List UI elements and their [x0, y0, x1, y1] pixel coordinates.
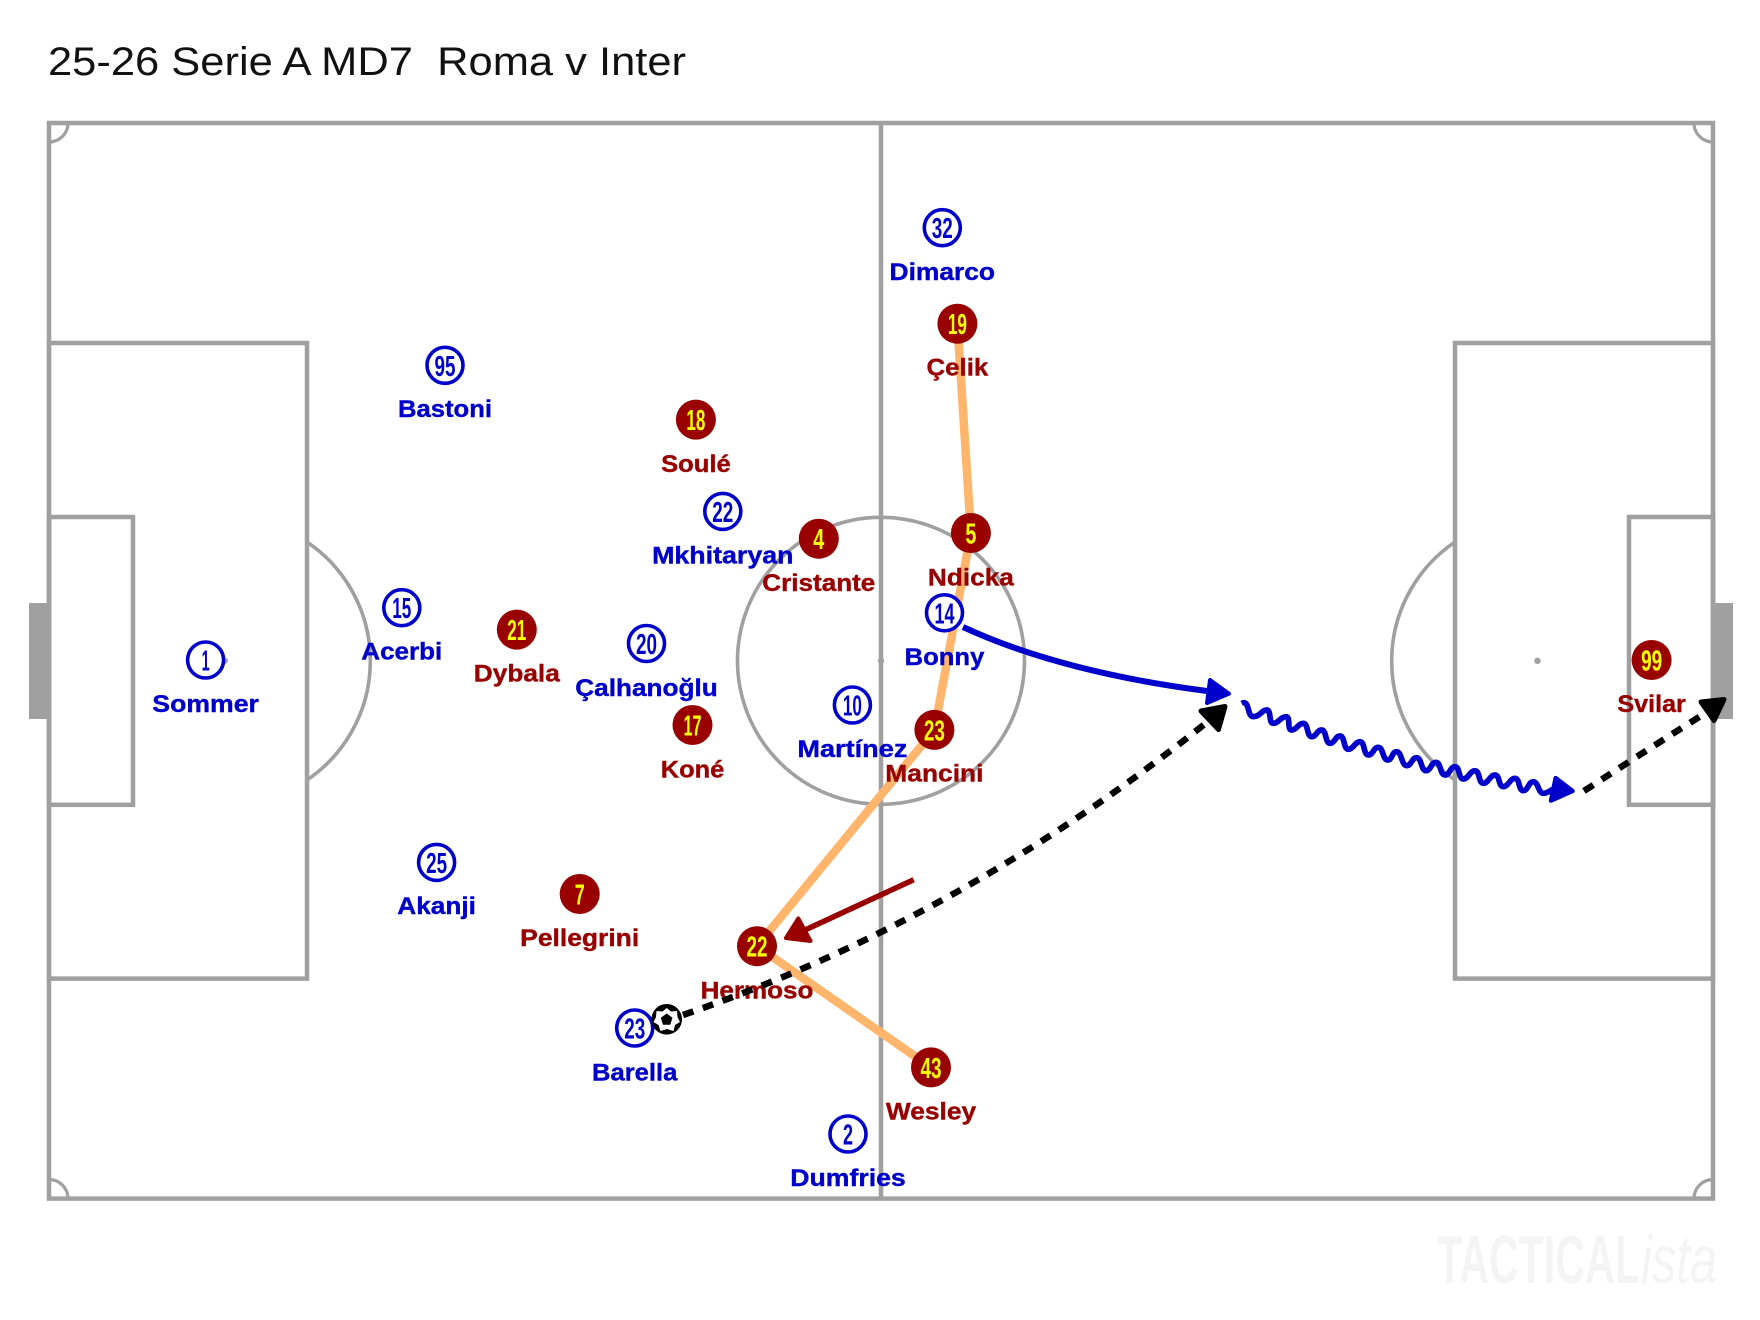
player: Pellegrini 7: 7	[575, 880, 585, 912]
player: Mancini 23	[885, 710, 984, 788]
corner arcs	[49, 123, 1713, 1199]
player: Çelik 19: Çelik	[927, 354, 989, 381]
player: Wesley 43	[886, 1047, 977, 1126]
player: Dybala 21	[474, 610, 561, 688]
player: Sommer 1	[152, 642, 259, 718]
player: Acerbi 15	[361, 590, 442, 666]
player: Mkhitaryan 22: Mkhitaryan	[652, 542, 794, 570]
left six-yard box	[49, 517, 133, 805]
Roma players	[474, 304, 1686, 1126]
player: Mancini 23: 23	[924, 715, 945, 747]
football pitch	[29, 123, 1733, 1199]
player: Bonny 14	[905, 595, 985, 671]
player: Bonny 14: 14	[934, 598, 954, 630]
player: Cristante 4	[762, 519, 875, 597]
arrow: Bonny run	[963, 627, 1229, 703]
player: Dumfries 2	[790, 1116, 906, 1192]
player: Barella 23	[592, 1010, 678, 1086]
player: Dimarco 32	[890, 210, 995, 286]
player: Dumfries 2: Dumfries	[790, 1165, 906, 1192]
player: Svilar 99: Svilar	[1617, 691, 1686, 718]
halfway line	[879, 123, 883, 1199]
centre circle	[738, 517, 1024, 804]
player: Martínez 10: 10	[843, 690, 862, 722]
Inter players	[152, 210, 995, 1192]
player: Wesley 43: Wesley	[886, 1099, 977, 1126]
player: Hermoso 22: 22	[746, 932, 768, 964]
player: Soulé 18: Soulé	[661, 451, 731, 478]
player: Mkhitaryan 22	[652, 493, 794, 570]
arrow: first pass dashed	[683, 706, 1225, 1015]
player: Akanji 25: 25	[426, 848, 447, 880]
player: Wesley 43: 43	[920, 1053, 942, 1085]
title: 25-26 Serie A MD7 Roma v Inter	[48, 40, 686, 84]
player: Dimarco 32: 32	[932, 213, 953, 245]
right six-yard box	[1629, 517, 1713, 805]
player: Martínez 10: Martínez	[797, 736, 907, 763]
left penalty arc	[307, 542, 370, 780]
player: Soulé 18	[661, 400, 731, 478]
player: Koné 17	[661, 705, 724, 783]
player: Ndicka 5: Ndicka	[928, 564, 1015, 591]
player: Cristante 4: 4	[813, 524, 824, 556]
right penalty box	[1455, 343, 1713, 979]
player: Ndicka 5	[928, 513, 1015, 591]
player: Dybala 21: 21	[507, 615, 526, 647]
player: Hermoso 22	[701, 926, 813, 1004]
player: Dybala 21: Dybala	[474, 661, 561, 688]
player: Acerbi 15: 15	[392, 593, 411, 625]
player: Hermoso 22: Hermoso	[701, 977, 813, 1004]
player: Pellegrini 7	[520, 874, 639, 952]
player: Svilar 99: 99	[1641, 646, 1662, 678]
pitch outline	[49, 123, 1713, 1199]
player: Akanji 25: Akanji	[397, 893, 476, 920]
player: Koné 17: 17	[684, 710, 702, 742]
player: Koné 17: Koné	[661, 756, 724, 783]
player: Çalhanoğlu 20: Çalhanoğlu	[575, 675, 718, 702]
left penalty box	[49, 343, 307, 979]
player: Dimarco 32: Dimarco	[890, 259, 995, 286]
left penalty spot	[222, 658, 228, 664]
player: Acerbi 15: Acerbi	[361, 639, 442, 666]
player: Barella 23: Barella	[592, 1060, 678, 1086]
arrow: Hermoso pressing move	[786, 880, 914, 941]
player: Mkhitaryan 22: 22	[712, 497, 733, 529]
player: Çalhanoğlu 20	[575, 626, 718, 702]
player: Bastoni 95: Bastoni	[398, 396, 492, 423]
centre spot	[878, 658, 884, 664]
player: Pellegrini 7: Pellegrini	[520, 925, 639, 952]
arrow: Bonny dribble wavy	[1242, 703, 1573, 801]
Roma defensive line	[757, 324, 971, 1067]
player: Sommer 1: Sommer	[152, 691, 259, 718]
left goal	[29, 603, 49, 719]
player: Barella 23: 23	[624, 1014, 645, 1046]
player: Bastoni 95	[398, 347, 492, 423]
player: Soulé 18: 18	[686, 405, 705, 437]
player: Çalhanoğlu 20: 20	[636, 629, 657, 661]
right penalty spot	[1534, 658, 1541, 664]
player: Svilar 99	[1617, 640, 1686, 718]
player: Çelik 19	[927, 304, 989, 381]
player: Martínez 10	[797, 687, 907, 763]
watermark: ista	[1641, 1222, 1717, 1298]
player: Akanji 25	[397, 844, 476, 920]
arrow: final shot dashed	[1584, 700, 1724, 791]
right goal	[1713, 603, 1733, 719]
right penalty arc	[1392, 542, 1455, 780]
player: Sommer 1: 1	[202, 646, 210, 678]
player: Mancini 23: Mancini	[885, 761, 984, 788]
player: Dumfries 2: 2	[843, 1120, 853, 1152]
player: Bastoni 95: 95	[434, 351, 456, 383]
icon: football	[651, 1004, 682, 1035]
player: Cristante 4: Cristante	[762, 570, 875, 597]
player: Çelik 19: 19	[948, 309, 967, 341]
player: Ndicka 5: 5	[965, 518, 976, 550]
player: Bonny 14: Bonny	[905, 644, 985, 671]
